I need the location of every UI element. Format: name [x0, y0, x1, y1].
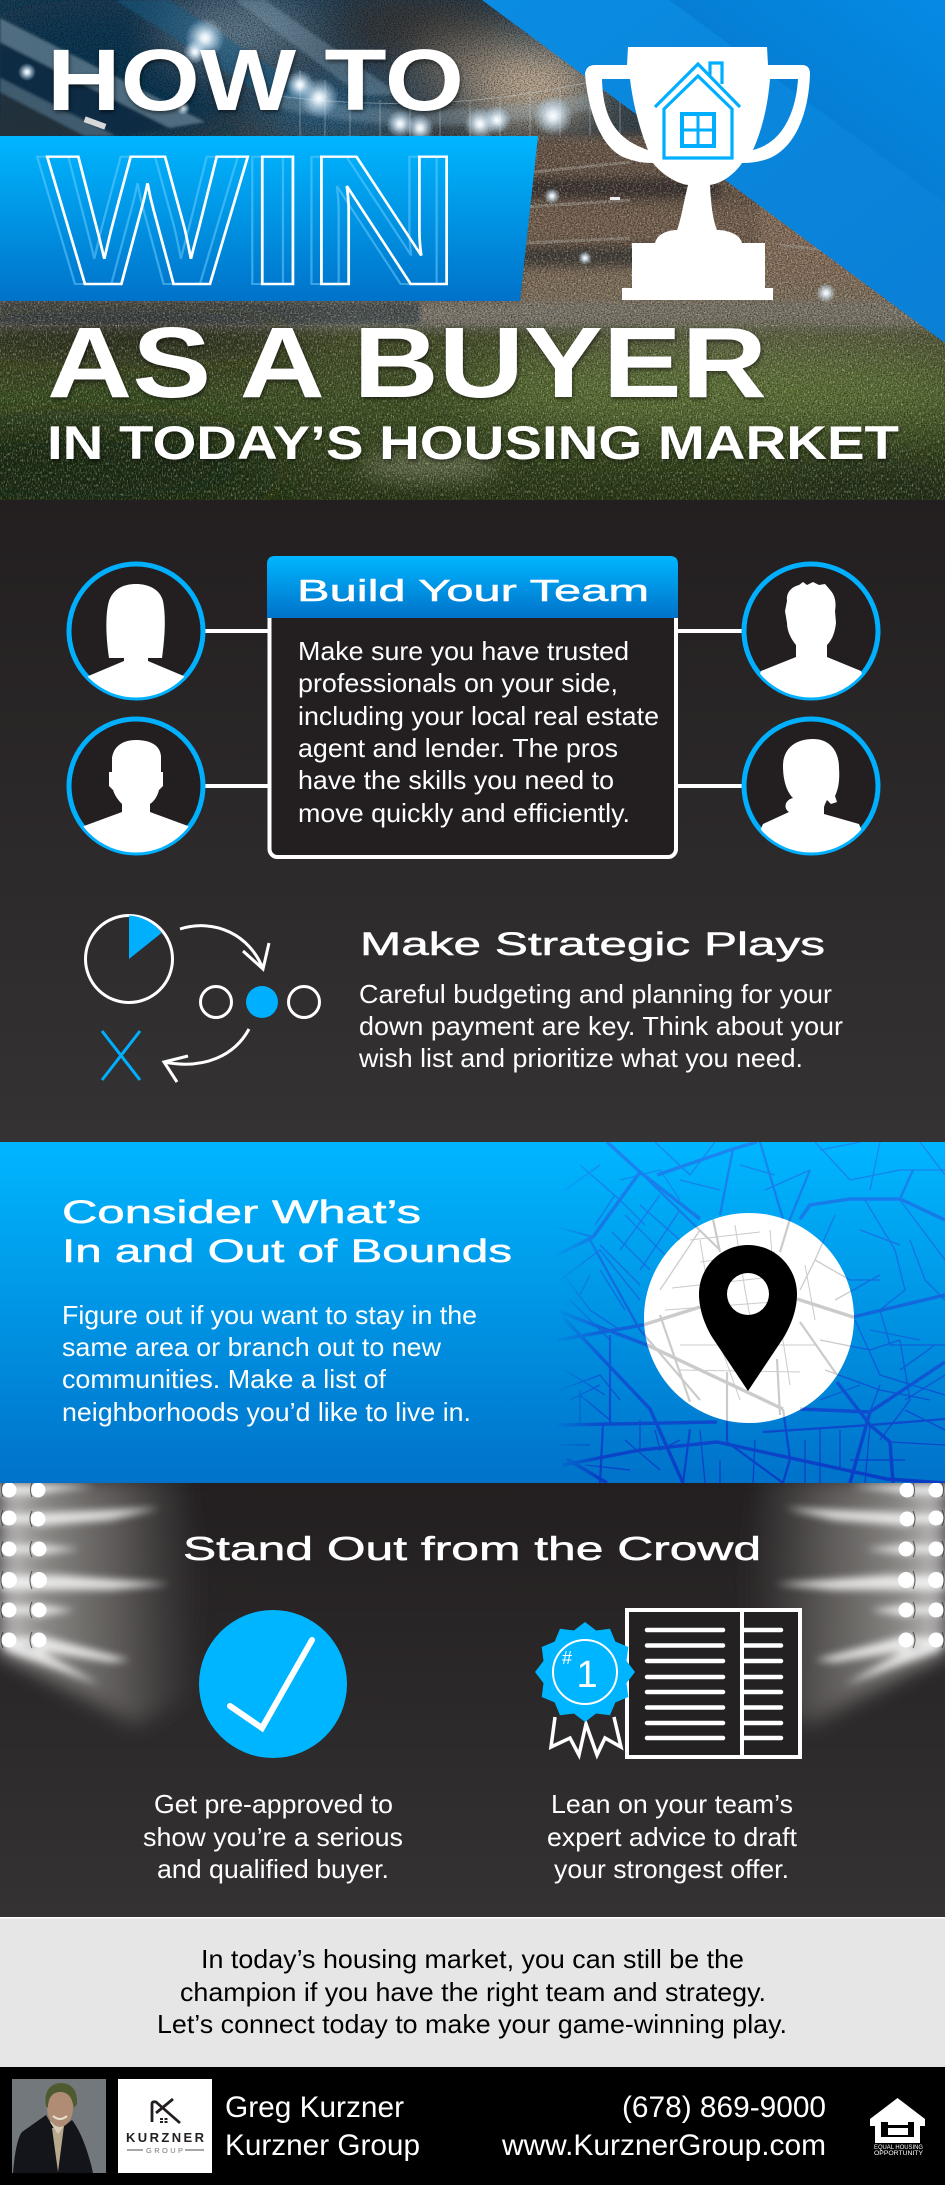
agent name: [225, 2091, 420, 2162]
panel: stand out from the crowd: [0, 1478, 945, 1917]
pre-approval text: show you’re a serious: [143, 1822, 403, 1852]
icon: equal housing opportunity: EQUAL HOUSING: [874, 2145, 923, 2151]
team body text: [298, 636, 659, 828]
title: as a buyer: AS A BUYER: [47, 307, 767, 419]
player circles: [200, 986, 320, 1018]
agent name: Greg Kurzner: [225, 2091, 404, 2124]
panel: consider what's in and out of bounds: [0, 1142, 945, 1483]
team body text: including your local real estate: [298, 701, 659, 731]
title: how to: HOW TO: [47, 32, 464, 129]
trophy icon: [585, 47, 810, 300]
kurzner group logo: GROUP: [146, 2146, 183, 2155]
closing text: Let’s connect today to make your game-winning play.: [157, 2009, 787, 2039]
icon: equal housing opportunity: [870, 2098, 925, 2157]
team body text: professionals on your side,: [298, 668, 618, 698]
award badge: #: [562, 1648, 572, 1668]
upper stand structure: [0, 0, 400, 136]
title: win outlined: WIN: [37, 118, 451, 324]
pre-approval text: Get pre-approved to: [154, 1789, 393, 1819]
pre-approval text: [143, 1789, 403, 1884]
contact details: [501, 2091, 826, 2162]
stand rows: [0, 136, 945, 324]
arrow: curve left: [164, 1029, 249, 1082]
bounds heading: [62, 1194, 512, 1269]
expert advice text: your strongest offer.: [554, 1854, 789, 1884]
stadium background photo: [0, 0, 945, 515]
clock circle with wedge: [86, 916, 172, 1002]
icon: map pin: [699, 1245, 797, 1391]
contact details: www.KurznerGroup.com: [501, 2129, 826, 2162]
closing text: [157, 1944, 787, 2039]
closing text: In today’s housing market, you can still be the: [201, 1944, 744, 1974]
left light glow: [0, 1478, 205, 1725]
avatar: man with short hair: [69, 719, 203, 866]
team body text: move quickly and efficiently.: [298, 798, 630, 828]
icon: check mark circle: [199, 1610, 347, 1758]
logo mark: [152, 2099, 180, 2123]
team body text: Make sure you have trusted: [298, 636, 629, 666]
crowd heading: Stand Out from the Crowd: [183, 1530, 761, 1567]
stadium floodlights: [0, 1478, 945, 1725]
kurzner group logo: KURZNER: [126, 2130, 205, 2145]
icon: house on trophy: [655, 63, 740, 158]
contact details: (678) 869-9000: [622, 2091, 826, 2124]
blue banner: [0, 136, 538, 301]
panel: closing message: [0, 1917, 945, 2067]
panel: dark team and plays section: [0, 500, 945, 1142]
bounds body text: same area or branch out to new: [62, 1332, 441, 1362]
agent name: Kurzner Group: [225, 2129, 420, 2162]
map pin circle: [644, 1213, 854, 1423]
plays body text: down payment are key. Think about your: [359, 1011, 843, 1041]
bounds body text: [62, 1300, 477, 1427]
hero: stadium header: [0, 0, 945, 515]
ribbon tails: [551, 1717, 621, 1755]
title: in today's housing market: IN TODAY’S HOUSING MARKET: [47, 416, 899, 469]
team heading: Build Your Team: [297, 573, 649, 608]
avatar: man with spiky hair: [744, 564, 878, 711]
expert advice text: [547, 1789, 798, 1884]
team body text: agent and lender. The pros: [298, 733, 618, 763]
panel: build your team: [69, 556, 878, 866]
avatar: woman with tied hair: [744, 719, 878, 866]
title: win outlined: [36, 156, 448, 286]
plays heading: Make Strategic Plays: [360, 926, 825, 962]
play diagram icon: [86, 916, 320, 1082]
bounds body text: neighborhoods you’d like to live in.: [62, 1397, 471, 1427]
expert advice text: expert advice to draft: [547, 1822, 798, 1852]
closing text: champion if you have the right team and strategy.: [180, 1977, 766, 2007]
avatar: woman with long hair: [69, 564, 203, 711]
plays body text: Careful budgeting and planning for your: [359, 979, 832, 1009]
icon: equal housing opportunity: OPPORTUNITY: [874, 2151, 923, 2157]
arrow: curve right: [180, 926, 269, 969]
bounds body text: Figure out if you want to stay in the: [62, 1300, 477, 1330]
agent photo: [12, 2079, 106, 2173]
document: [627, 1610, 800, 1757]
award badge: [535, 1622, 635, 1722]
panel: make strategic plays: [86, 916, 843, 1082]
blue diagonal bands: [482, 0, 945, 343]
panel: footer contact bar: [0, 2067, 945, 2185]
award badge: 1: [576, 1654, 598, 1696]
connector lines: [205, 631, 742, 786]
title: win outlined: WIN: [47, 118, 461, 324]
blue x mark: [102, 1031, 140, 1080]
plays body text: [358, 979, 843, 1073]
bounds body text: communities. Make a list of: [62, 1364, 387, 1394]
team heading bar: [267, 556, 678, 618]
pre-approval text: and qualified buyer.: [157, 1854, 389, 1884]
expert advice text: Lean on your team’s: [551, 1789, 793, 1819]
icon: offer document with award ribbon: [535, 1610, 800, 1757]
grass tones: [0, 320, 945, 515]
team text box: [270, 600, 676, 857]
bounds heading: Consider What’s: [62, 1194, 421, 1230]
plays body text: wish list and prioritize what you need.: [358, 1043, 803, 1073]
right light glow: [740, 1478, 945, 1725]
street map background: [557, 1142, 945, 1483]
team body text: have the skills you need to: [298, 765, 614, 795]
bounds heading: In and Out of Bounds: [62, 1233, 512, 1269]
kurzner group logo: [118, 2079, 212, 2173]
